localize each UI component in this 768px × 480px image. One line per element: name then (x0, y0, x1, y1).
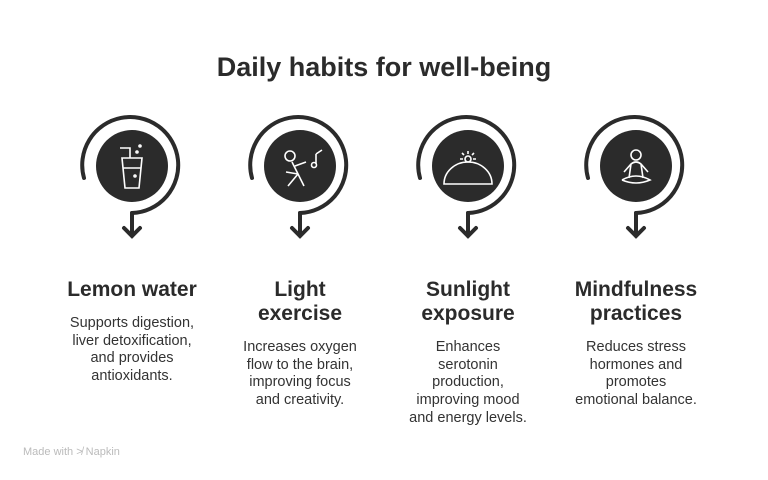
column: sunlight: and energy levels. (409, 410, 527, 426)
column: lemon water: Lemon water (67, 278, 197, 301)
column: sunlight: Sunlight (426, 278, 510, 301)
column: mindfulness: practices (590, 302, 682, 325)
column: sunlight (409, 278, 527, 426)
icon: sunlight (418, 117, 514, 236)
column: mindfulness: emotional balance. (575, 392, 697, 408)
column: mindfulness (575, 278, 697, 408)
column: sunlight: improving mood (416, 392, 520, 408)
column: sunlight: exposure (421, 302, 515, 325)
column: light exercise: exercise (258, 302, 342, 325)
column: light exercise: improving focus (249, 374, 351, 390)
icon: light exercise (250, 117, 346, 236)
column: light exercise (243, 278, 357, 408)
column: lemon water: and provides (90, 350, 174, 366)
column: sunlight: serotonin (438, 357, 498, 373)
column: mindfulness: Mindfulness (575, 278, 697, 301)
column: light exercise: flow to the brain, (247, 357, 353, 373)
column: mindfulness: Reduces stress (586, 339, 686, 355)
icon: lemon water (82, 117, 178, 236)
column: sunlight: production, (432, 374, 504, 390)
column: lemon water: liver detoxification, (72, 333, 192, 349)
column: mindfulness: hormones and (590, 357, 682, 373)
column: mindfulness: promotes (606, 374, 666, 390)
column: light exercise: Light (274, 278, 326, 301)
footer: Made with ≯ Napkin (23, 446, 120, 458)
column: lemon water: Supports digestion, (70, 315, 194, 331)
column: lemon water (67, 278, 197, 384)
column: light exercise: Increases oxygen (243, 339, 357, 355)
column: sunlight: Enhances (436, 339, 500, 355)
icon: mindfulness (586, 117, 682, 236)
title: Daily habits for well-being (217, 52, 551, 82)
column: light exercise: and creativity. (256, 392, 344, 408)
icons (80, 115, 684, 239)
column: lemon water: antioxidants. (91, 368, 173, 384)
